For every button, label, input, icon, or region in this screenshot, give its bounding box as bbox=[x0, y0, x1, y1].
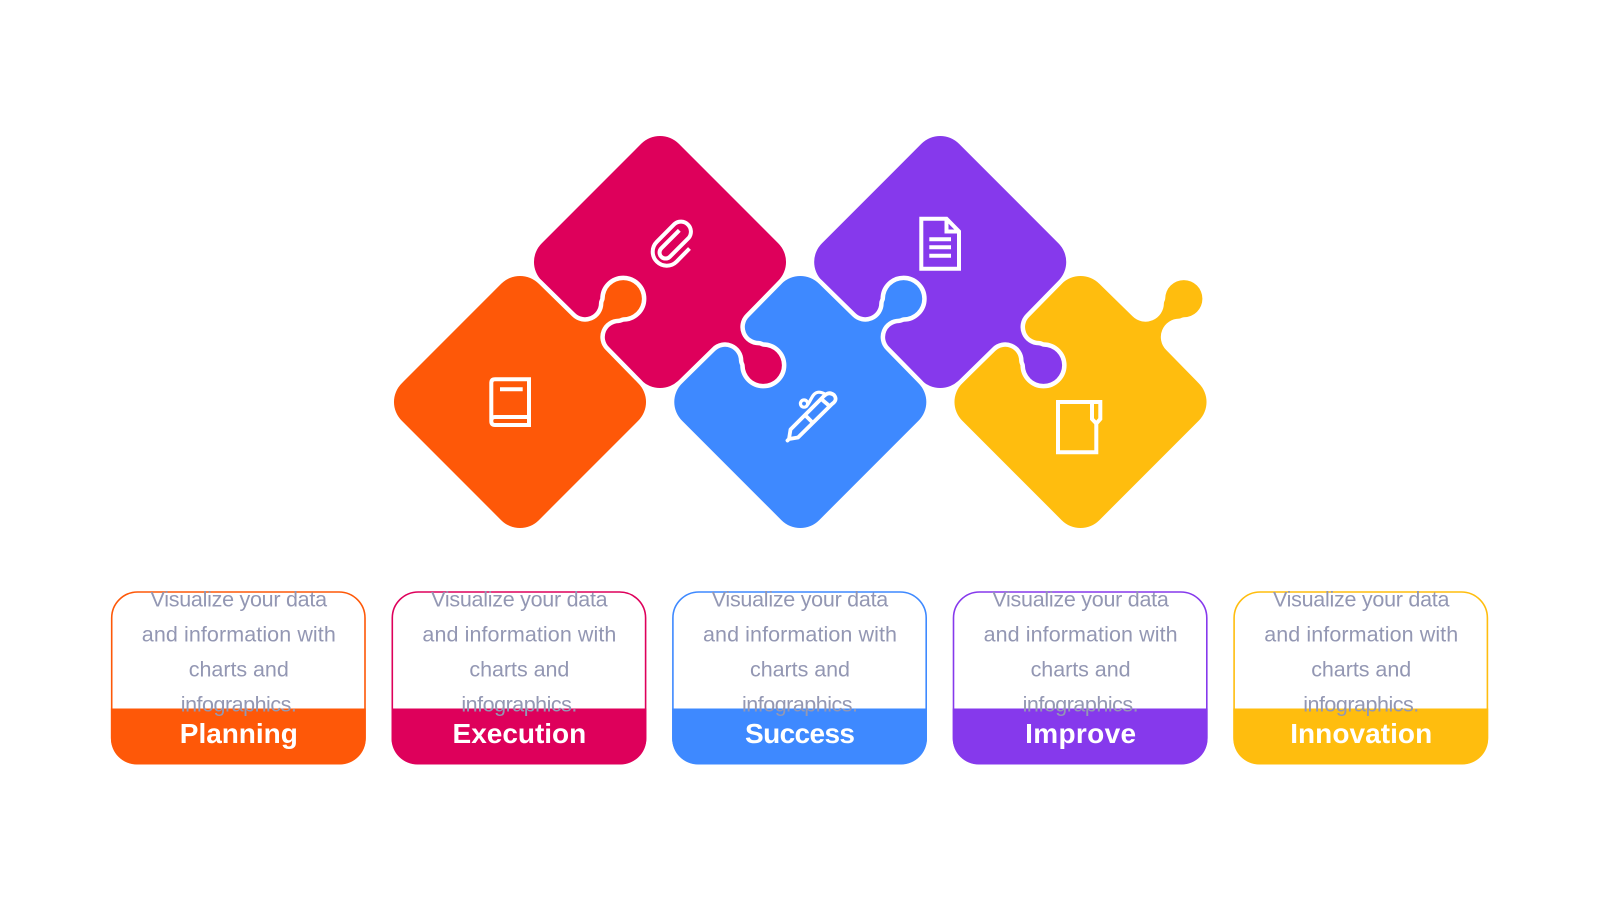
card description: charts and bbox=[750, 658, 850, 682]
card title band bbox=[953, 708, 1208, 764]
card description: Visualize your data bbox=[712, 588, 888, 612]
puzzle diagram bbox=[394, 136, 1207, 528]
icon: paperclip bbox=[653, 222, 691, 266]
card description: charts and bbox=[1031, 658, 1131, 682]
card description: Visualize your data bbox=[1273, 588, 1449, 612]
card title band bbox=[1233, 708, 1488, 764]
card outline bbox=[954, 592, 1207, 764]
card title band bbox=[111, 708, 366, 764]
card outline bbox=[673, 592, 926, 764]
card description: charts and bbox=[189, 658, 289, 682]
card: planning bbox=[111, 588, 366, 764]
puzzle piece: planning (orange) bbox=[394, 276, 646, 528]
card description: Visualize your data bbox=[431, 588, 608, 612]
card description: infographics. bbox=[461, 692, 577, 716]
card title: Planning bbox=[180, 718, 298, 749]
puzzle piece: innovation (yellow) bbox=[954, 276, 1207, 528]
card title: Improve bbox=[1025, 718, 1136, 749]
card outline bbox=[392, 592, 646, 764]
card description: charts and bbox=[469, 658, 569, 682]
card outline bbox=[112, 592, 365, 764]
card: innovation bbox=[1233, 588, 1488, 764]
icon: pen bbox=[788, 392, 836, 440]
card description: and information with bbox=[142, 622, 336, 646]
card title band bbox=[672, 708, 927, 764]
card title: Innovation bbox=[1290, 718, 1432, 749]
card: improve bbox=[953, 588, 1208, 764]
card description: charts and bbox=[1311, 658, 1411, 682]
card: execution bbox=[392, 588, 646, 764]
icon: folder bbox=[1058, 402, 1100, 452]
puzzle piece: improve (purple) bbox=[814, 136, 1066, 388]
puzzle piece: execution (pink) bbox=[534, 136, 786, 388]
card description: and information with bbox=[703, 622, 897, 646]
card description: infographics. bbox=[1303, 692, 1419, 716]
card description: infographics. bbox=[181, 692, 297, 716]
card: success bbox=[672, 588, 927, 764]
card title: Success bbox=[745, 718, 855, 749]
card description: Visualize your data bbox=[992, 588, 1169, 612]
icon: document bbox=[921, 219, 959, 269]
card description: and information with bbox=[984, 622, 1178, 646]
card description: and information with bbox=[1264, 622, 1458, 646]
card description: and information with bbox=[422, 622, 616, 646]
card outline bbox=[1234, 592, 1487, 764]
icon: book bbox=[491, 379, 529, 425]
card description: infographics. bbox=[742, 692, 858, 716]
card description: Visualize your data bbox=[151, 588, 327, 612]
card description: infographics. bbox=[1023, 692, 1139, 716]
card title: Execution bbox=[453, 718, 586, 749]
card title band bbox=[392, 708, 646, 764]
puzzle piece: success (blue) bbox=[674, 276, 926, 528]
